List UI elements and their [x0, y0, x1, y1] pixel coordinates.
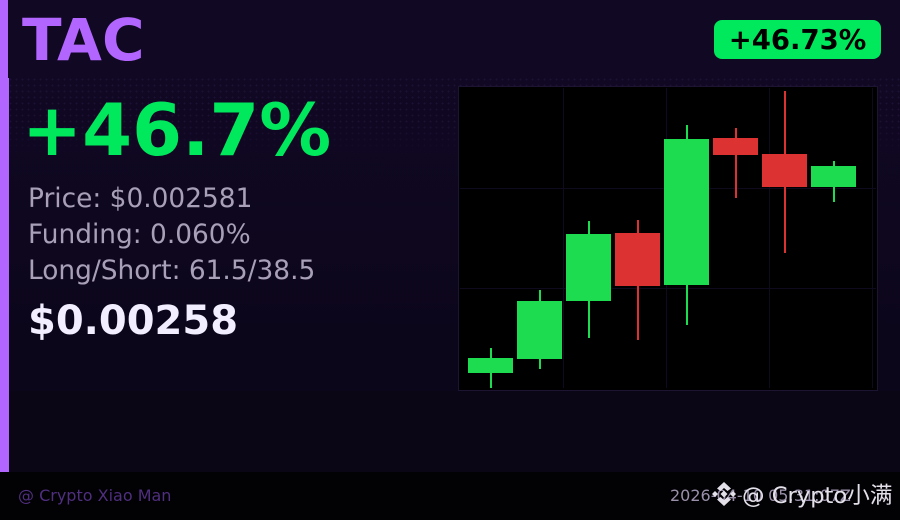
long short ratio: Long/Short: 61.5/38.5 — [28, 255, 315, 286]
big change value: +46.7% — [22, 88, 331, 172]
panel: footer — [0, 472, 900, 520]
badge: change percent: +46.73% — [729, 24, 866, 56]
stats text block — [28, 183, 315, 286]
candle 1 — [468, 348, 513, 388]
watermark text: @ Crypto小满 — [742, 483, 892, 509]
header accent bar — [0, 0, 8, 78]
candle 5 — [664, 125, 709, 325]
panel: body — [0, 78, 900, 472]
watermark — [712, 482, 892, 509]
icon: binance diamond — [712, 482, 736, 506]
candle 6 — [713, 128, 758, 198]
panel: header — [0, 0, 900, 78]
badge: change percent — [714, 20, 881, 59]
candle 8 — [811, 161, 856, 202]
price large: $0.00258 — [28, 298, 238, 344]
candle 2 — [517, 290, 562, 369]
candle 4 — [615, 220, 660, 340]
price: Price: $0.002581 — [28, 183, 252, 214]
funding: Funding: 0.060% — [28, 219, 251, 250]
footer timestamp: 2026-04-10 05:31:07Z — [670, 486, 851, 505]
candle 3 — [566, 221, 611, 338]
footer handle: @ Crypto Xiao Man — [18, 486, 171, 505]
body upper panel background — [9, 78, 900, 391]
title: TAC: TAC — [22, 6, 145, 74]
candle 7 — [762, 91, 807, 253]
body accent bar — [0, 78, 9, 472]
candlestick chart — [458, 86, 878, 391]
